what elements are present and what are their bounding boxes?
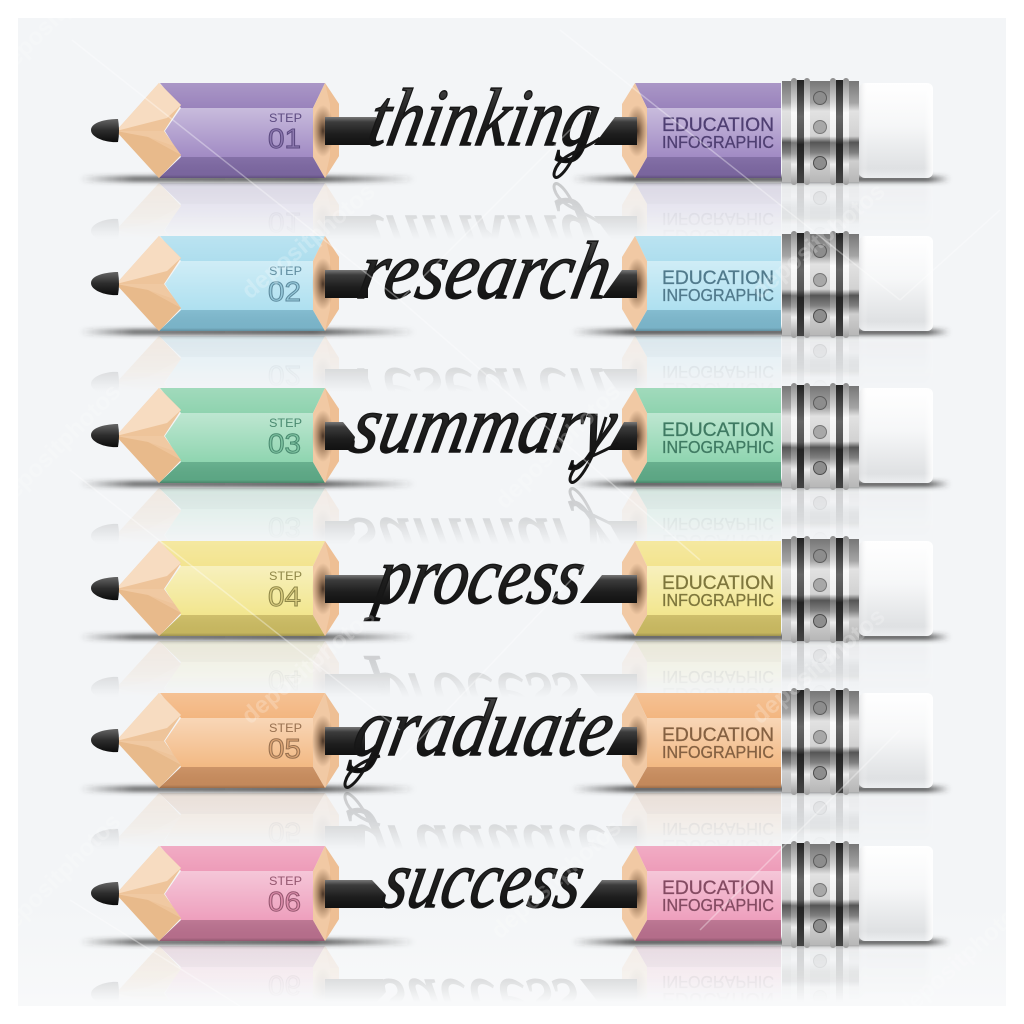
watermark: depositphotos — [747, 603, 891, 730]
reflections — [92, 182, 859, 994]
step 3: summary — [80, 379, 950, 490]
watermark: depositphotos — [237, 603, 381, 730]
step 5: graduate: STEP — [269, 721, 302, 735]
step 5: graduate: 05 — [268, 733, 301, 764]
step 4: process: 04 — [268, 581, 301, 612]
step 5: graduate: INFOGRAPHIC — [662, 742, 774, 762]
step 4: process: process — [364, 530, 594, 621]
step 4: process — [80, 530, 950, 643]
step 3: summary: EDUCATION — [662, 419, 774, 441]
step 1: thinking: EDUCATION — [662, 114, 774, 136]
step 2: research — [80, 225, 950, 338]
step 2: research: INFOGRAPHIC — [662, 285, 774, 305]
watermark: depositphotos — [490, 378, 626, 514]
step 5: graduate: graduate — [346, 682, 623, 773]
watermark: depositphotos — [747, 178, 891, 305]
step 3: summary: 03 — [268, 428, 301, 459]
step 6: success: 06 — [268, 886, 301, 917]
step 2: research: 02 — [268, 276, 301, 307]
step 2: research: EDUCATION — [662, 267, 774, 289]
step 6: success: INFOGRAPHIC — [662, 895, 774, 915]
step 6: success: success — [375, 834, 593, 925]
step 1: thinking: STEP — [269, 111, 302, 125]
step 2: research: research — [351, 225, 621, 316]
step 6: success: EDUCATION — [662, 877, 774, 899]
step 4: process: STEP — [269, 569, 302, 583]
watermark: depositphotos — [237, 178, 381, 305]
step 1: thinking: 01 — [268, 123, 301, 154]
step 4: process: INFOGRAPHIC — [662, 590, 774, 610]
step 3: summary: STEP — [269, 416, 302, 430]
step 4: process: EDUCATION — [662, 572, 774, 594]
step 5: graduate: EDUCATION — [662, 724, 774, 746]
watermark: depositphotos — [486, 814, 627, 944]
step 1: thinking: thinking — [361, 72, 609, 163]
step 3: summary: INFOGRAPHIC — [662, 437, 774, 457]
step 1: thinking: INFOGRAPHIC — [662, 132, 774, 152]
step 3: summary: summary — [344, 379, 626, 470]
step 6: success — [80, 834, 950, 948]
step 2: research: STEP — [269, 264, 302, 278]
step 5: graduate — [80, 682, 950, 795]
step 1: thinking — [80, 72, 950, 185]
step 6: success: STEP — [269, 874, 302, 888]
